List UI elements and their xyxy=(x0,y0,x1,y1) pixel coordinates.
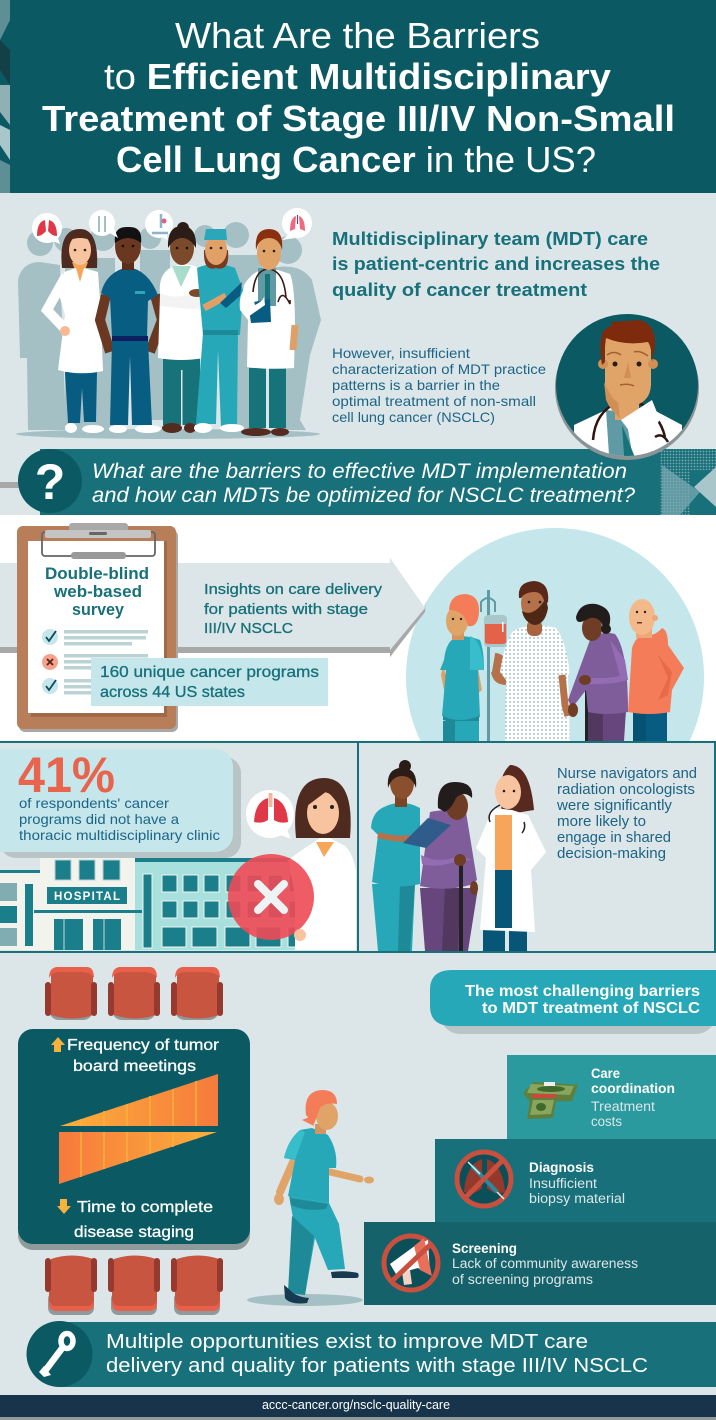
text block: nurse navigators: more likely to xyxy=(557,814,646,830)
conclusion text: delivery and quality for patients with stage III/IV NSCLC xyxy=(106,1355,648,1377)
illustration: bottom row of chairs xyxy=(45,1256,223,1315)
clipboard heading xyxy=(45,565,149,619)
clipboard heading: Double-blind xyxy=(45,565,149,583)
care team panel: shared decision-making xyxy=(371,760,697,951)
title: What Are the Barriers xyxy=(175,15,540,56)
illustration: nurse, patient and doctor xyxy=(371,760,546,951)
text: diagnosis: Diagnosis xyxy=(529,1160,594,1175)
elderly patient with cane xyxy=(568,604,628,741)
icon: key xyxy=(26,1321,92,1387)
text: care coordination: Treatment xyxy=(591,1099,655,1114)
icon: question mark: ? xyxy=(35,454,65,510)
survey section background xyxy=(0,515,716,741)
illustration: healthcare team xyxy=(16,208,321,439)
speech bubble: microscope xyxy=(145,210,173,240)
illustration: woman doctor xyxy=(288,778,357,951)
text: care coordination xyxy=(591,1066,675,1129)
team member: man in navy scrubs xyxy=(100,227,162,433)
text block: barrier statement: cell lung cancer (NSCLC) xyxy=(332,409,495,425)
text: frequency of tumor board meetings: Frequency of tumor xyxy=(67,1037,220,1054)
text: frequency of tumor board meetings: board meetings xyxy=(73,1058,196,1075)
text: care coordination: costs xyxy=(591,1114,622,1129)
text block: nurse navigators: Nurse navigators and xyxy=(557,766,697,782)
hospital sign: HOSPITAL xyxy=(54,891,120,903)
callout: 160 programs: 160 unique cancer programs xyxy=(100,664,319,681)
heading: most challenging barriers: The most challenging barriers xyxy=(465,983,700,1000)
IV pole with blood bag xyxy=(481,590,507,741)
text block: nurse navigators xyxy=(556,766,697,862)
patient in dotted gown xyxy=(492,581,570,741)
hospital panel: 41 percent xyxy=(0,743,357,951)
illustration: top row of chairs xyxy=(45,967,223,1020)
text: screening: of screening programs xyxy=(452,1272,593,1287)
text: care coordination: Care xyxy=(591,1066,620,1081)
heading: most challenging barriers: to MDT treatment of NSCLC xyxy=(482,1000,700,1017)
question band xyxy=(0,449,716,515)
callout: 41 percent stat xyxy=(0,747,241,858)
text: time to complete disease staging: disease staging xyxy=(74,1224,194,1241)
heading: most challenging barriers xyxy=(430,970,716,1034)
clipboard: survey xyxy=(17,523,178,732)
text block: nurse navigators: radiation oncologists xyxy=(557,782,695,798)
title xyxy=(42,15,675,180)
text block: barrier statement xyxy=(332,345,546,425)
step: screening xyxy=(364,1222,716,1305)
heading: MDT care: quality of cancer treatment xyxy=(332,280,587,300)
callout: 41 percent stat: 41% xyxy=(18,747,115,803)
heading: MDT care: Multidisciplinary team (MDT) care xyxy=(332,229,648,249)
question text: and how can MDTs be optimized for NSCLC treatment? xyxy=(92,484,635,507)
clipboard heading: survey xyxy=(72,601,125,619)
text: screening: Lack of community awareness xyxy=(452,1256,638,1271)
conclusion text xyxy=(106,1331,648,1377)
checklist xyxy=(42,629,148,694)
heading: MDT care: is patient-centric and increases the xyxy=(332,254,660,274)
team member: nurse in teal scrubs xyxy=(194,229,244,433)
icon: up arrow xyxy=(51,1037,65,1052)
text block: nurse navigators: decision-making xyxy=(557,846,666,862)
insights text: III/IV NSCLC xyxy=(204,620,293,637)
speech bubble: lungs xyxy=(246,790,294,839)
text block: barrier statement: However, insufficient xyxy=(332,345,470,361)
icon: question mark xyxy=(18,449,82,513)
text block: barrier statement: characterization of MDT practice xyxy=(332,361,546,377)
callout: 41 percent stat: thoracic multidisciplinary clinic xyxy=(19,827,220,843)
insights text xyxy=(204,581,383,637)
conclusion band xyxy=(26,1321,716,1387)
clipboard heading: web-based xyxy=(53,583,142,601)
text block: nurse navigators: engage in shared xyxy=(557,830,671,846)
header panel xyxy=(0,0,716,193)
icon: stacks of money xyxy=(523,1082,578,1119)
step: care coordination xyxy=(507,1055,716,1139)
speech bubble: pink lungs xyxy=(282,208,312,240)
text: frequency of tumor board meetings xyxy=(67,1037,220,1075)
chart: opposing wedges xyxy=(59,1074,218,1184)
question text: What are the barriers to effective MDT implementation xyxy=(92,460,627,483)
title: to Efficient Multidisciplinary xyxy=(104,56,611,97)
insights text: Insights on care delivery xyxy=(204,581,383,598)
text: diagnosis xyxy=(529,1160,625,1206)
title: Treatment of Stage III/IV Non-Small xyxy=(42,98,675,139)
patient with head scarf xyxy=(440,594,484,743)
title: Cell Lung Cancer in the US? xyxy=(116,139,596,180)
icon: worried doctor portrait xyxy=(555,314,699,470)
text: care coordination: coordination xyxy=(591,1081,675,1096)
silhouettes of background team xyxy=(18,222,321,430)
footer xyxy=(0,1395,716,1420)
speech bubble: lungs xyxy=(32,213,62,244)
team member: male doctor with stethoscope xyxy=(240,229,295,436)
step: diagnosis xyxy=(435,1139,716,1222)
conclusion text: Multiple opportunities exist to improve MDT care xyxy=(106,1331,588,1353)
text: time to complete disease staging xyxy=(74,1199,213,1241)
bald patient in orange hoodie xyxy=(628,599,684,741)
callout: 41 percent stat: programs did not have a xyxy=(19,811,179,827)
callout: 160 programs: across 44 US states xyxy=(100,684,245,701)
team member: woman in white coat xyxy=(158,222,207,433)
clip xyxy=(42,523,155,559)
callout: 41 percent stat: of respondents' cancer xyxy=(19,795,169,811)
text block: nurse navigators: were significantly xyxy=(556,798,673,814)
icon: no biopsy xyxy=(457,1152,511,1206)
callout: 160 programs xyxy=(91,658,328,706)
text block: barrier statement: optimal treatment of non-small xyxy=(332,393,536,409)
red X icon xyxy=(228,854,314,941)
text: time to complete disease staging: Time to complete xyxy=(77,1199,213,1216)
team member: woman doctor xyxy=(47,229,104,433)
speech bubble: forceps xyxy=(89,210,118,238)
heading: MDT care xyxy=(332,229,660,300)
illustration: patients in circle xyxy=(390,528,704,741)
text block: barrier statement: patterns is a barrier in the xyxy=(332,377,500,393)
question text xyxy=(92,460,635,507)
insights text: for patients with stage xyxy=(204,601,368,618)
panel: tumor board table xyxy=(18,1029,250,1250)
illustration: hospital building xyxy=(0,858,295,950)
text: diagnosis: biopsy material xyxy=(529,1191,625,1206)
illustration: walking patient xyxy=(247,1090,374,1306)
icon: no megaphone xyxy=(384,1236,438,1290)
icon: down arrow xyxy=(57,1199,71,1214)
text: screening: Screening xyxy=(452,1241,517,1256)
text: screening xyxy=(452,1241,638,1287)
arrow band: insights on care delivery xyxy=(0,558,425,657)
footer: accc-cancer.org/nsclc-quality-care xyxy=(262,1398,450,1412)
text: diagnosis: Insufficient xyxy=(529,1176,597,1191)
